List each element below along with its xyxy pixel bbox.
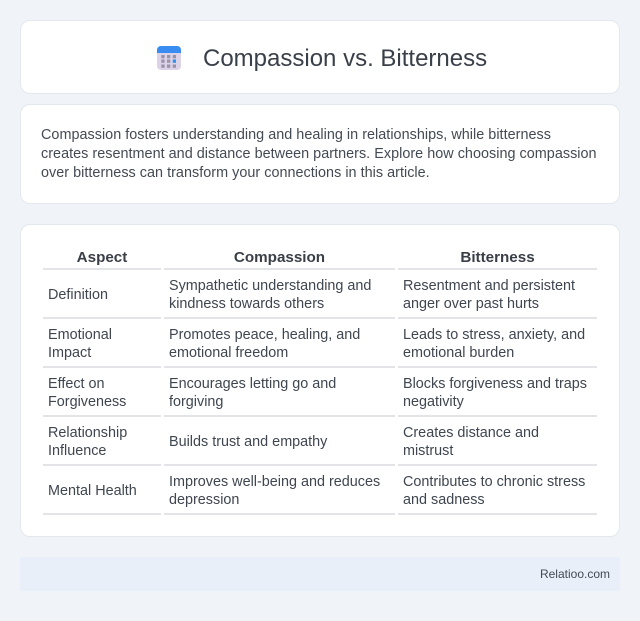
row: Definition: anger over past hurts [403,296,539,312]
row: Emotional Impact: Promotes peace, healing, and [169,327,360,343]
row: Definition: Resentment and persistent [403,278,575,294]
row: Mental Health: Contributes to chronic stress [403,474,585,490]
row: Emotional Impact: Emotional [48,327,112,343]
row: Mental Health: Improves well-being and reduces [169,474,380,490]
row: Effect on Forgiveness: Effect on [48,376,105,392]
row: Emotional Impact: emotional burden [403,345,514,361]
intro text: Compassion fosters understanding and healing in relationships, while bitterness [41,127,551,143]
footer text: Relatioo.com [540,567,610,581]
row: Definition: Sympathetic understanding and [169,278,371,294]
row: Mental Health: Mental Health [48,483,137,499]
table header: Bitterness: Bitterness [460,249,535,266]
row: Effect on Forgiveness: forgiving [169,394,223,410]
table header: Aspect: Aspect [77,249,127,266]
row: Relationship Influence: Relationship [48,425,127,441]
row: Emotional Impact: Leads to stress, anxiety, and [403,327,585,343]
row: Effect on Forgiveness: Encourages letting go and [169,376,336,392]
row: Definition [48,278,575,312]
table header: Compassion: Compassion [234,249,325,266]
intro text: creates resentment and distance between partners. Explore how choosing compassion [41,146,597,162]
row: Relationship Influence: Creates distance and [403,425,539,441]
footer bar [20,557,620,591]
row: Definition: kindness towards others [169,296,324,312]
row: Mental Health [48,474,585,508]
table card [20,224,620,537]
title: Compassion vs. Bitterness [203,45,487,72]
intro text: over bitterness can transform your connections in this article. [41,165,430,181]
intro text [41,127,597,181]
icon: calendar [157,46,181,70]
row: Effect on Forgiveness: negativity [403,394,464,410]
row: Relationship Influence: Influence [48,443,106,459]
row: Emotional Impact: Impact [48,345,91,361]
row: Effect on Forgiveness [48,376,587,410]
row: Emotional Impact [48,327,585,361]
row: Definition: Definition [48,287,108,303]
row: Relationship Influence [48,425,539,459]
intro card [20,104,620,204]
row: Emotional Impact: emotional freedom [169,345,288,361]
row: Effect on Forgiveness: Blocks forgiveness and traps [403,376,587,392]
row: Mental Health: depression [169,492,239,508]
row: Relationship Influence: mistrust [403,443,453,459]
header card [20,20,620,94]
row: Effect on Forgiveness: Forgiveness [48,394,126,410]
row: Relationship Influence: Builds trust and empathy [169,434,327,450]
row: Mental Health: and sadness [403,492,485,508]
